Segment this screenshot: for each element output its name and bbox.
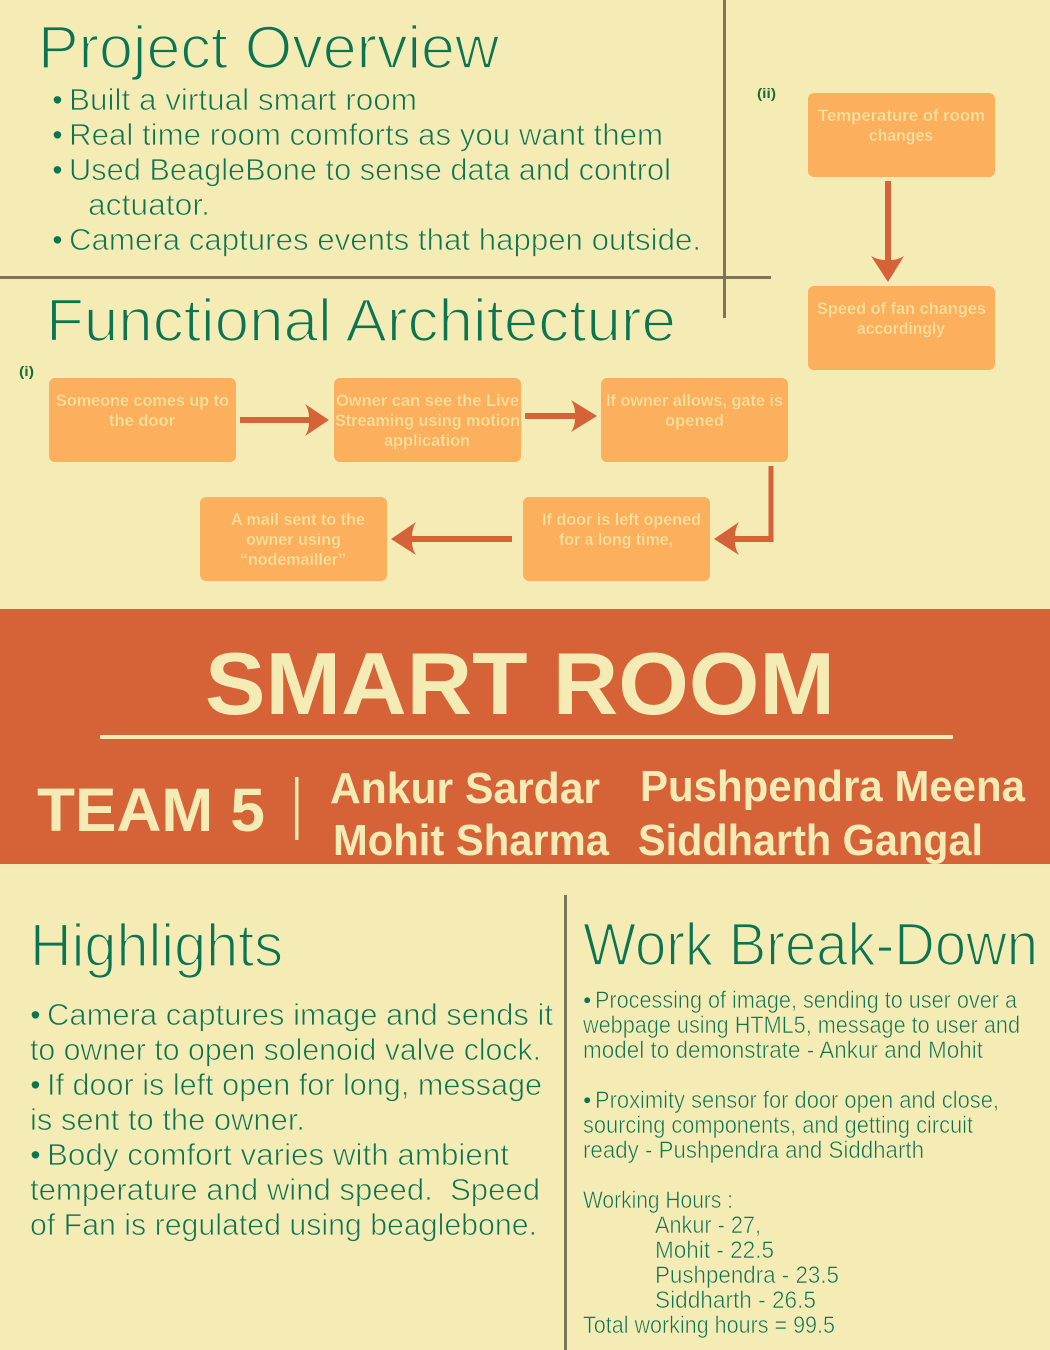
text block: highlights bullets: [30, 997, 553, 1242]
team member names: Pushpendra Meena: [640, 762, 1026, 811]
flow box: gate opened: opened: [665, 411, 724, 430]
text block: ankur and mohit work: [582, 987, 1020, 1064]
text block: pushpendra and siddharth work: •: [583, 1087, 591, 1114]
flow box: owner sees live streaming: application: [384, 431, 470, 450]
text block: working hours: Total working hours = 99.5: [583, 1312, 835, 1339]
arrow: door to live streaming: [240, 404, 329, 436]
heading: functional architecture: Functional Architecture: [46, 287, 676, 354]
text block: pushpendra and siddharth work: Proximity sensor for door open and close,: [595, 1087, 999, 1114]
text block: working hours: Working Hours :: [583, 1187, 733, 1214]
text block: ankur and mohit work: Processing of image, sending to user over a: [595, 987, 1018, 1014]
text block: highlights bullets: •: [30, 1137, 41, 1172]
text block: highlights bullets: •: [30, 997, 41, 1032]
flow box: gate opened: [601, 378, 788, 462]
text block: highlights bullets: If door is left open for long, message: [47, 1067, 542, 1102]
flow box: owner sees live streaming: Streaming using motion: [335, 411, 520, 430]
flow box: owner sees live streaming: Owner can see the Live: [336, 391, 519, 410]
flow box: fan speed: [808, 286, 995, 370]
text block: overview bullets: •: [52, 117, 63, 152]
text block: highlights bullets: Camera captures image and sends it: [47, 997, 553, 1032]
text block: overview bullets: Real time room comforts as you want them: [69, 117, 663, 152]
team member names: Siddharth Gangal: [638, 816, 983, 865]
label: diagram i: (i): [19, 363, 34, 379]
arrow: temperature to fan speed: [871, 181, 904, 282]
text block: working hours: Ankur - 27,: [655, 1212, 761, 1239]
text block: working hours: Mohit - 22.5: [655, 1237, 774, 1264]
text block: highlights bullets: temperature and wind speed. Speed: [30, 1172, 540, 1207]
panel: work break-down: [582, 911, 1038, 1339]
team label: TEAM 5: [37, 776, 265, 844]
text block: ankur and mohit work: model to demonstrate - Ankur and Mohit: [583, 1037, 983, 1064]
text block: highlights bullets: •: [30, 1067, 41, 1102]
flow box: door left open: If door is left opened: [542, 510, 701, 529]
text block: overview bullets: [52, 82, 701, 257]
team member names: Mohit Sharma: [333, 816, 610, 865]
flow box: mail sent: “nodemailler”: [240, 550, 346, 569]
text block: working hours: [583, 1187, 839, 1339]
arrow: door left open to mail: [391, 522, 512, 555]
text block: highlights bullets: is sent to the owner.: [30, 1102, 305, 1137]
title: SMART ROOM: [205, 634, 835, 733]
flow box: temperature changes: changes: [869, 126, 933, 145]
flow box: mail sent: A mail sent to the: [231, 510, 365, 529]
text block: overview bullets: Built a virtual smart room: [69, 82, 417, 117]
flow box: someone comes up to the door: the door: [109, 411, 175, 430]
text block: highlights bullets: Body comfort varies with ambient: [47, 1137, 509, 1172]
text block: working hours: Pushpendra - 23.5: [655, 1262, 839, 1289]
text block: overview bullets: actuator.: [88, 187, 210, 222]
flow box: mail sent: owner using: [246, 530, 341, 549]
text block: overview bullets: •: [52, 82, 63, 117]
text block: ankur and mohit work: •: [583, 987, 591, 1014]
panel: highlights: [30, 912, 553, 1242]
text block: pushpendra and siddharth work: ready - Pushpendra and Siddharth: [583, 1137, 924, 1164]
flow box: fan speed: Speed of fan changes: [817, 299, 986, 318]
flow box: door left open: for a long time,: [559, 530, 673, 549]
label: diagram ii: (ii): [757, 85, 776, 101]
arrow: gate to door left open: [714, 466, 774, 555]
flow box: owner sees live streaming: [334, 378, 521, 462]
team member names: Ankur Sardar: [330, 764, 600, 813]
flow box: door left open: [523, 497, 710, 581]
flow box: someone comes up to the door: [49, 378, 236, 462]
flow box: temperature changes: Temperature of room: [818, 106, 985, 125]
text block: working hours: Siddharth - 26.5: [655, 1287, 816, 1314]
heading: highlights: Highlights: [30, 912, 283, 979]
text block: overview bullets: •: [52, 152, 63, 187]
text block: pushpendra and siddharth work: sourcing components, and getting circuit: [583, 1112, 973, 1139]
banner: smart room title and team: [0, 609, 1050, 865]
panel: project overview: [38, 14, 701, 257]
text block: pushpendra and siddharth work: [583, 1087, 999, 1164]
flow box: temperature changes: [808, 93, 995, 177]
flow box: mail sent: [200, 497, 387, 581]
text block: overview bullets: Used BeagleBone to sense data and control: [69, 152, 671, 187]
flow box: fan speed: accordingly: [857, 319, 945, 338]
team member names: [330, 762, 1026, 865]
flow box: someone comes up to the door: Someone comes up to: [56, 391, 229, 410]
text block: overview bullets: •: [52, 222, 63, 257]
text block: highlights bullets: to owner to open solenoid valve clock.: [30, 1032, 541, 1067]
text block: highlights bullets: of Fan is regulated using beaglebone.: [30, 1207, 537, 1242]
arrow: live streaming to gate: [525, 400, 597, 432]
flow box: gate opened: If owner allows, gate is: [606, 391, 783, 410]
text block: overview bullets: Camera captures events that happen outside.: [69, 222, 701, 257]
heading: project overview: Project Overview: [38, 14, 500, 81]
